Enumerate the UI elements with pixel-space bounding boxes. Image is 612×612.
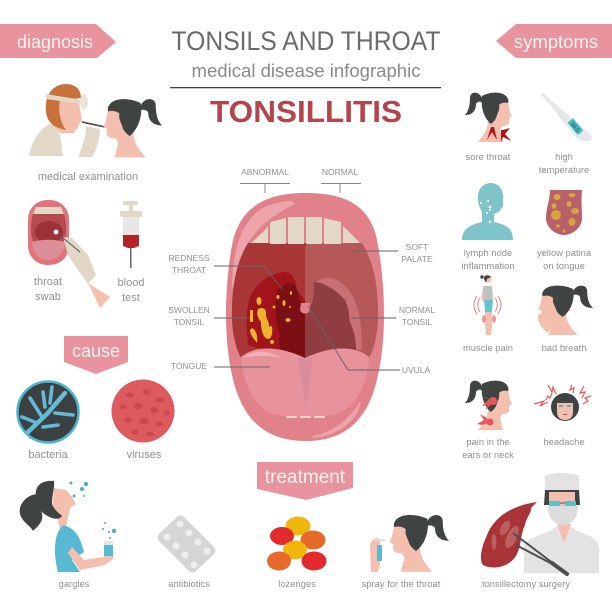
lip highlights [232,201,294,290]
label: tongue [171,361,270,371]
caption: gargles: gargles [59,578,90,589]
uvula [300,303,310,314]
ribbon: treatment: treatment [265,467,346,488]
icon: antibiotics [158,516,216,572]
icon: tongue patina [546,190,582,235]
ribbon: treatment [257,462,353,500]
caption: high temperature: temperature [539,164,589,175]
icon: lozenges [267,516,326,570]
caption: lozenges: lozenges [278,578,316,589]
icon: pain in ears or neck [465,381,512,430]
ribbon: symptoms [496,24,612,58]
icon: sore throat [465,93,512,142]
caption: bacteria: bacteria [28,449,68,461]
caption: spray for the throat: spray for the throat [362,578,441,589]
icon: throat swab [28,200,110,308]
icon: gargles [20,481,116,572]
icon: medical examination [29,84,162,157]
ribbon: cause: cause [72,341,120,361]
swollen tonsil [247,272,305,358]
label: soft palate: SOFT [406,242,428,252]
label: soft palate: PALATE [401,254,433,264]
icon: tonsillectomy surgery [481,473,599,574]
label: uvula [308,306,431,375]
label: normal tonsil [352,305,435,327]
caption: blood test: blood [118,277,144,289]
label: soft palate [352,242,433,264]
ribbon: diagnosis [0,24,116,58]
label: redness throat: THROAT [172,265,206,275]
icon: bad breath [538,286,593,335]
caption: antibiotics: antibiotics [168,578,210,589]
icon: blood test [120,201,142,268]
ribbon: symptoms: symptoms [514,31,598,52]
label: tongue: TONGUE [171,361,207,371]
label: normal tonsil: TONSIL [402,317,433,327]
label: normal: NORMAL [322,167,358,177]
diagram: open mouth [226,193,384,441]
caption: headache: headache [543,436,585,447]
label: swollen tonsil: SWOLLEN [168,305,210,315]
icon: spray for the throat [370,515,449,572]
tongue [241,348,369,417]
caption: tonsillectomy surgery: tonsillectomy surgery [482,578,570,589]
icon: thermometer: 39.5 [568,122,580,134]
label: uvula: UVULA [402,365,431,375]
caption: lymph node inflammation: inflammation [461,260,515,271]
ribbon: diagnosis: diagnosis [17,32,93,52]
caption: lymph node inflammation: lymph node [464,247,512,258]
throat right: normal [305,243,378,360]
icon: muscle pain [474,275,501,335]
lower teeth [286,416,326,418]
icon: thermometer [540,93,592,141]
heading: tonsillitis: TONSILLITIS [210,94,402,129]
caption: pain in ears or neck: ears or neck [462,449,514,460]
label: abnormal: ABNORMAL [241,167,289,177]
caption: sore throat: sore throat [466,151,511,162]
caption: muscle pain: muscle pain [463,342,513,353]
subtitle: medical disease infographic [192,60,420,81]
caption: yellow patina: yellow patina [537,247,592,258]
throat left: abnormal [232,243,305,360]
teeth [251,217,360,244]
icon: lymph node [462,183,513,240]
pus spots [250,291,292,344]
label: normal tonsil: NORMAL [399,305,435,315]
ribbon: cause [64,336,128,374]
label: redness throat: REDNESS [168,253,210,263]
label: abnormal [240,167,290,193]
lips [226,193,384,441]
title divider [170,87,441,88]
caption: bad breath: bad breath [542,342,586,353]
caption: viruses: viruses [127,449,162,461]
normal tonsil [316,278,362,350]
label: redness throat [168,253,282,289]
label: swollen tonsil [168,305,250,327]
caption: throat swab: throat [34,276,62,288]
label: normal [321,167,361,193]
icon: bacteria [18,382,78,442]
title: TONSILS AND THROAT [172,26,440,56]
icon: viruses [112,380,174,442]
caption: yellow patina: on tongue [543,260,585,271]
icon: headache [534,385,591,421]
caption: throat swab: swab [35,291,61,303]
caption: medical examination: medical examination [38,171,138,183]
caption: blood test: test [122,292,140,304]
label: swollen tonsil: TONSIL [174,317,205,327]
caption: high temperature: high [555,151,573,162]
caption: pain in ears or neck: pain in the [466,436,510,447]
